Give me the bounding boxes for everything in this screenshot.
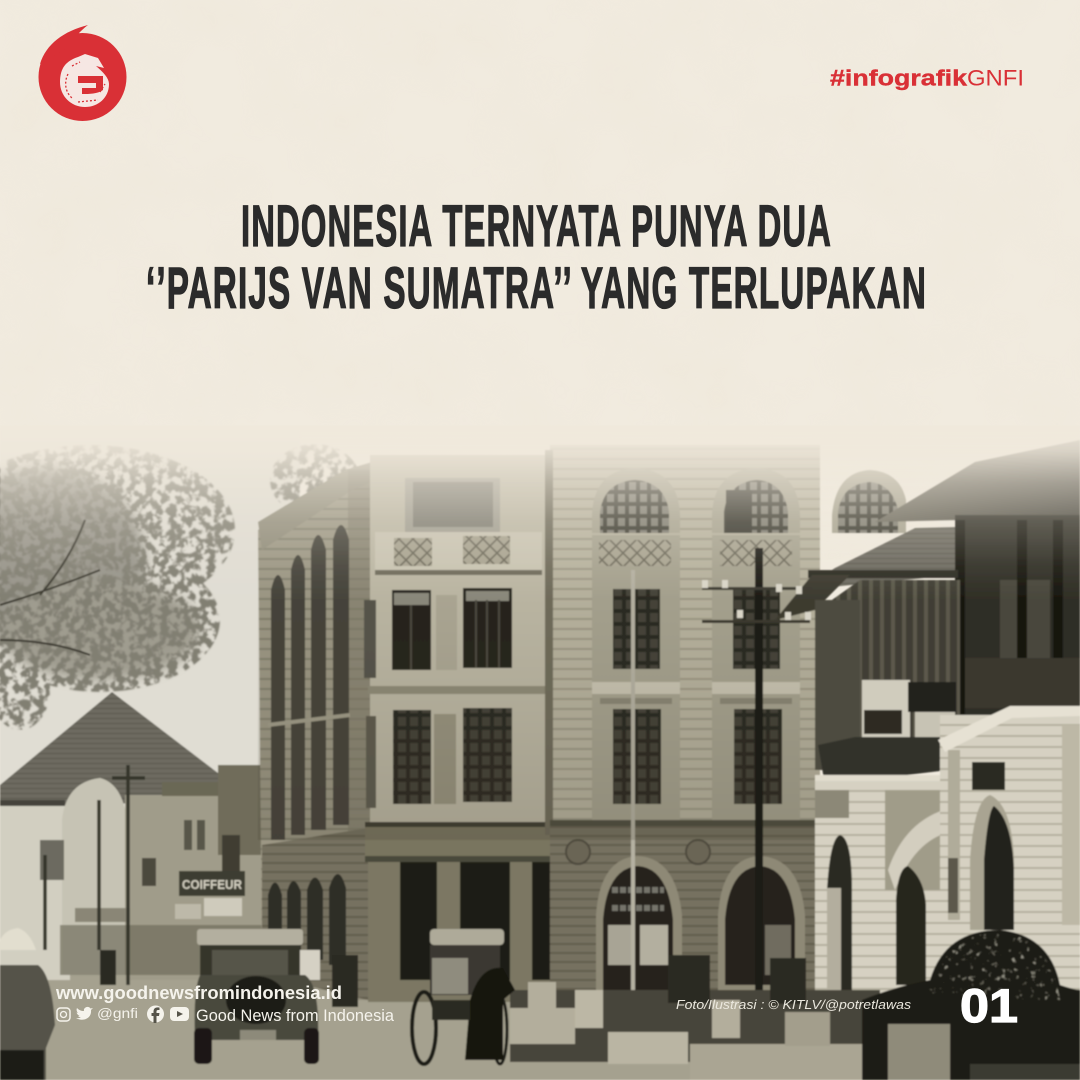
arch door	[970, 795, 1014, 930]
vintage car	[194, 929, 319, 1064]
top paper fade over the photo	[0, 425, 1080, 600]
social row	[57, 1005, 395, 1025]
domed building	[62, 778, 128, 975]
top roof	[875, 440, 1080, 522]
flag pole	[631, 570, 635, 1000]
verandah	[955, 515, 1080, 720]
windows	[392, 590, 431, 670]
title	[146, 194, 927, 321]
garden wall and bush	[510, 930, 1080, 1080]
utility pole	[702, 548, 812, 1080]
icon: facebook	[147, 1006, 164, 1023]
window bays	[592, 535, 680, 830]
man with pith helmet	[0, 928, 55, 1080]
main building: side wing	[258, 462, 372, 1000]
hashtag label	[830, 66, 1024, 90]
pedestrians	[100, 950, 806, 1007]
eagle G emblem	[60, 54, 109, 107]
wooden wall	[815, 580, 960, 770]
stone wall pieces	[510, 1008, 575, 1044]
hashtag label: GNFI	[967, 66, 1024, 90]
ground floor	[550, 825, 820, 1000]
street	[0, 975, 720, 1080]
bay cornice	[365, 822, 552, 862]
pitched roof	[0, 692, 218, 808]
main white block	[940, 715, 1080, 1000]
bush mass	[862, 930, 1080, 1080]
right pavilion	[775, 440, 1080, 1000]
wing ground floor	[262, 828, 368, 1000]
coiffeur shop sign: COIFFEUR	[182, 877, 243, 892]
logo: GNFI red swirl	[38, 25, 126, 121]
left street buildings	[0, 692, 265, 985]
tree shadow mass	[0, 465, 200, 680]
website url: www.goodnewsfromindonesia.id	[55, 983, 342, 1003]
low dark planting	[510, 990, 880, 1080]
wooden balcony	[818, 737, 948, 785]
icon: twitter	[76, 1007, 93, 1020]
lower white block	[815, 775, 950, 1000]
tall arched windows	[271, 525, 349, 840]
icon: youtube	[170, 1007, 189, 1021]
hashtag label: #infografik	[830, 66, 968, 90]
old photograph of the street	[0, 425, 1080, 1080]
handle: @gnfi	[97, 1005, 138, 1021]
main building: right facade	[258, 445, 906, 1000]
small window block	[862, 680, 956, 740]
tree foliage	[0, 444, 360, 730]
sign plate	[972, 762, 1005, 790]
icon: instagram	[57, 1008, 70, 1021]
page name: Good News from Indonesia	[196, 1007, 395, 1025]
balcony	[375, 532, 542, 575]
tiled roof	[800, 527, 955, 590]
verandah posts	[960, 520, 1058, 725]
wing ledges	[268, 715, 350, 725]
sky	[0, 430, 300, 830]
coiffeur shop sign	[179, 871, 245, 896]
ground floor arches	[596, 856, 682, 990]
photo credit: Foto/Ilustrasi : © KITLV/@potretlawas	[676, 997, 912, 1012]
horse carriage	[412, 929, 515, 1064]
page number: 01	[960, 979, 1018, 1032]
white house	[0, 805, 70, 980]
bush leaves	[925, 932, 1060, 1000]
main building: curved bay	[364, 455, 552, 1002]
balustrade	[965, 658, 1080, 708]
lamp post	[45, 765, 145, 985]
tree branches	[0, 520, 100, 655]
lower facade shading	[258, 560, 820, 840]
upper arched windows	[592, 468, 680, 533]
shop row	[125, 795, 265, 980]
bay columns	[368, 862, 552, 1002]
